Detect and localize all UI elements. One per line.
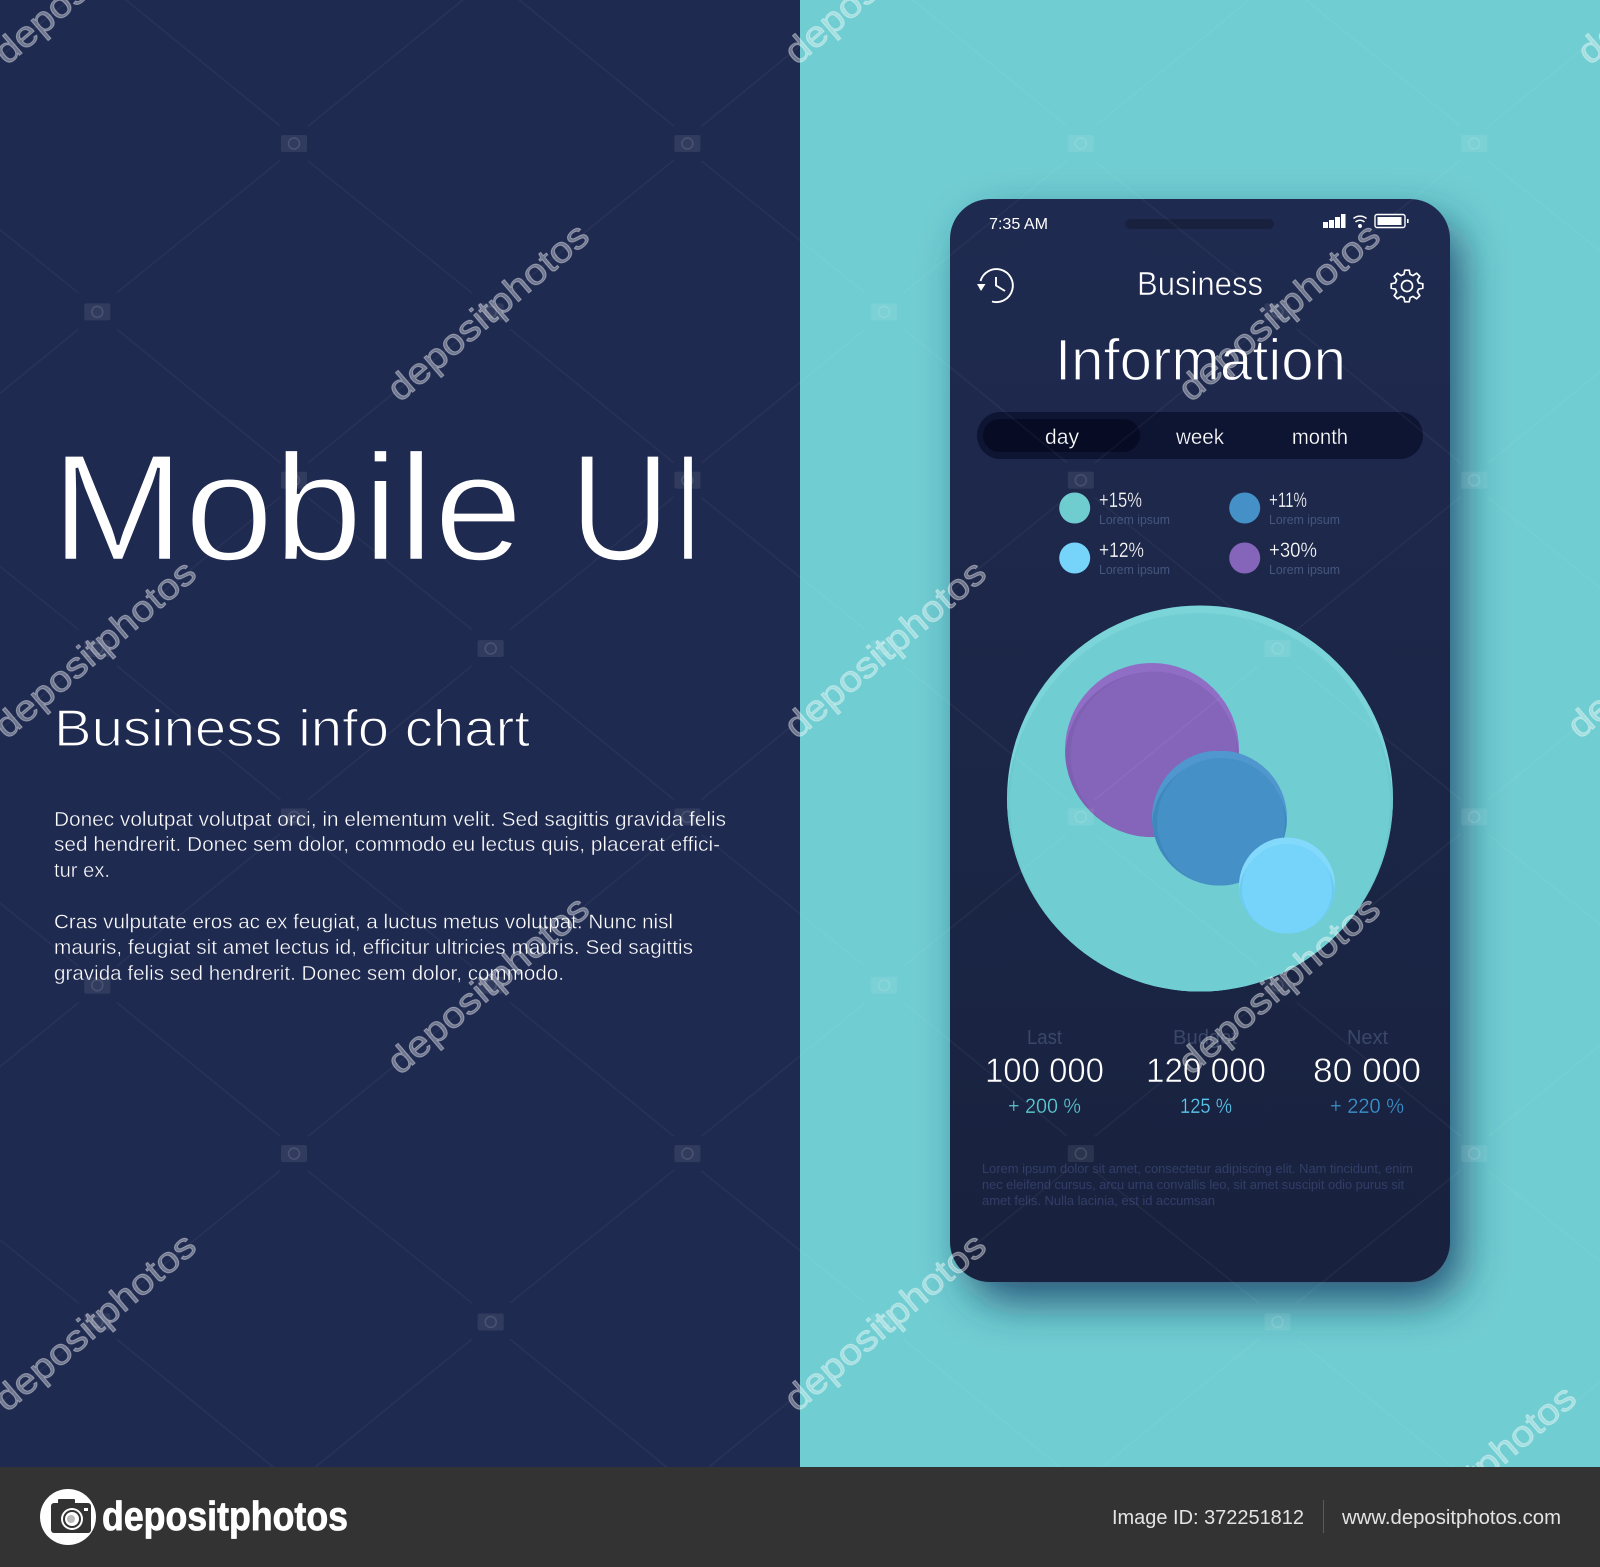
text block: phone footnote: Lorem ipsum dolor sit amet, consectetur adipiscing elit. Nam tincidunt, enim <box>982 1161 1413 1176</box>
legend: +30% <box>1269 539 1317 562</box>
legend: Lorem ipsum <box>1099 563 1170 577</box>
period tabs <box>977 412 1423 459</box>
stat: Budget: 120 000 <box>1146 1052 1266 1090</box>
period tabs: month <box>1292 426 1348 449</box>
period tabs: week <box>1175 426 1224 449</box>
subheading: Business info chart: Business info chart <box>54 700 531 758</box>
watermark overlay: depositphotos <box>776 551 994 746</box>
bubble: outer teal <box>1007 605 1393 1002</box>
icon: wifi <box>1354 216 1366 227</box>
watermark overlay: depositphotos <box>1170 214 1388 409</box>
text block: description: Donec volutpat volutpat orci, in elementum velit. Sed sagittis gravida felis <box>54 809 726 831</box>
divider <box>1323 1500 1324 1533</box>
watermark overlay: depositphotos <box>1170 887 1388 1082</box>
watermark overlay: depositphotos <box>776 1224 994 1419</box>
stat: Last <box>985 1027 1104 1118</box>
stat: Last: + 200 % <box>1008 1095 1081 1118</box>
watermark overlay: depositphotos <box>379 214 597 409</box>
text block: description: mauris, feugiat sit amet lectus id, efficitur ultricies mauris. Sed sagittis <box>54 937 693 959</box>
stat: Next: 80 000 <box>1313 1052 1421 1090</box>
legend: +11% <box>1269 489 1307 512</box>
stat: Budget <box>1146 1027 1266 1118</box>
heading: Mobile UI <box>51 423 702 593</box>
text block: description: tur ex. <box>54 860 110 882</box>
text block: description: Cras vulputate eros ac ex feugiat, a luctus metus volutpat. Nunc nisl <box>54 912 673 934</box>
stat: Next <box>1313 1027 1421 1118</box>
footer bar <box>0 1467 1600 1567</box>
icon: signal bars <box>1323 214 1346 228</box>
icon: settings gear <box>1391 270 1423 302</box>
icon: depositphotos logo <box>40 1489 96 1545</box>
legend: +15% <box>1099 489 1142 512</box>
phone shadow <box>968 222 1460 1300</box>
icon: battery <box>1375 214 1409 228</box>
image id: Image ID: 372251812 <box>1112 1507 1304 1529</box>
stat: Budget: 125 % <box>1180 1095 1232 1118</box>
legend: +12% <box>1099 539 1144 562</box>
stat: Last: 100 000 <box>985 1052 1104 1090</box>
stat: Next: Next <box>1347 1027 1388 1049</box>
bubble: purple <box>1065 663 1239 846</box>
period tabs: day <box>1045 426 1080 449</box>
heading: Mobile UI: U <box>570 423 670 593</box>
bubble: blue <box>1152 751 1287 894</box>
status time: 7:35 AM <box>989 216 1048 233</box>
chart: nested bubble chart <box>1007 605 1393 1002</box>
screen title: Business: Business <box>1137 265 1263 302</box>
heading: Mobile UI: I <box>674 423 702 593</box>
watermark overlay: depositphotos <box>1366 1376 1584 1567</box>
text block: phone footnote <box>982 1161 1413 1208</box>
heading: Information: Information <box>1055 328 1346 393</box>
legend: Lorem ipsum <box>1269 563 1340 577</box>
panel: left navy background <box>0 0 800 1467</box>
panel: phone mockup <box>950 199 1450 1282</box>
website: www.depositphotos.com <box>1341 1507 1561 1529</box>
phone body <box>950 199 1450 1282</box>
legend <box>1059 489 1340 577</box>
heading: Mobile UI: Mobile <box>51 423 523 593</box>
stat: Budget: Budget <box>1173 1027 1237 1049</box>
text block: description <box>54 809 726 985</box>
notch <box>1125 219 1274 229</box>
logo wordmark: depositphotos <box>102 1493 348 1539</box>
watermark overlay: depositphotos <box>379 887 597 1082</box>
text block: description: gravida felis sed hendrerit. Donec sem dolor, commodo. <box>54 963 564 985</box>
stat: Last: Last <box>1027 1027 1062 1049</box>
icon: history clock <box>977 269 1013 302</box>
text block: phone footnote: nec eleifend cursus, arcu urna convallis leo, sit amet suscipit odio purus sit <box>982 1177 1404 1192</box>
legend: Lorem ipsum <box>1099 513 1170 527</box>
bubble: light blue <box>1239 837 1335 942</box>
legend: Lorem ipsum <box>1269 513 1340 527</box>
text block: description: sed hendrerit. Donec sem dolor, commodo eu lectus quis, placerat effici- <box>54 834 720 856</box>
text block: phone footnote: amet felis. Nulla lacinia, est id accumsan <box>982 1193 1215 1208</box>
panel: right teal background <box>800 0 1600 1467</box>
stat: Next: + 220 % <box>1330 1095 1404 1118</box>
